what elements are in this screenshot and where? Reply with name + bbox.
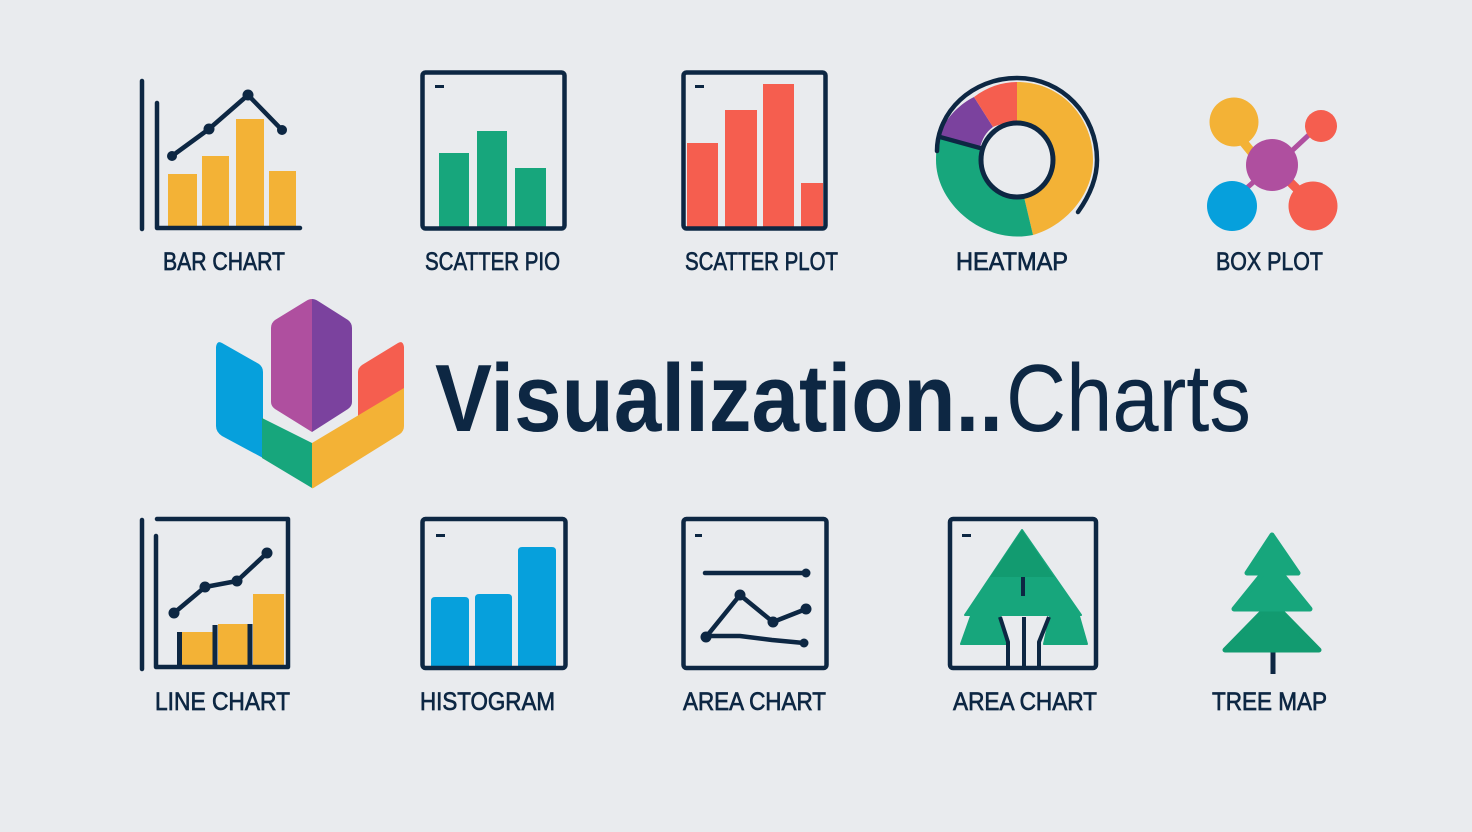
title: Charts (1006, 345, 1251, 452)
icon: tree map (1225, 535, 1319, 674)
icon: area chart tree (950, 519, 1096, 668)
label: histogram: HISTOGRAM (420, 688, 555, 716)
label: area chart 2: AREA CHART (953, 688, 1097, 716)
title: Visualization.. (435, 345, 1003, 452)
label: heatmap: HEATMAP (956, 248, 1068, 276)
icon: histogram (422, 519, 566, 668)
icon: heatmap donut (936, 78, 1097, 237)
label: line chart: LINE CHART (155, 688, 290, 716)
icon: scatter pio (422, 72, 564, 228)
label: scatter pio: SCATTER PIO (425, 248, 560, 276)
logo (216, 299, 404, 488)
icon: box plot network (1207, 98, 1338, 231)
label: scatter plot: SCATTER PLOT (685, 248, 838, 276)
icon: bar chart (142, 81, 300, 229)
icon: scatter plot (684, 72, 826, 228)
label: area chart: AREA CHART (683, 688, 826, 716)
icon: area chart lines (684, 519, 826, 668)
label: bar chart: BAR CHART (163, 248, 285, 276)
label: tree map: TREE MAP (1212, 688, 1327, 716)
icon: line chart (142, 519, 288, 669)
label: box plot: BOX PLOT (1216, 248, 1323, 276)
